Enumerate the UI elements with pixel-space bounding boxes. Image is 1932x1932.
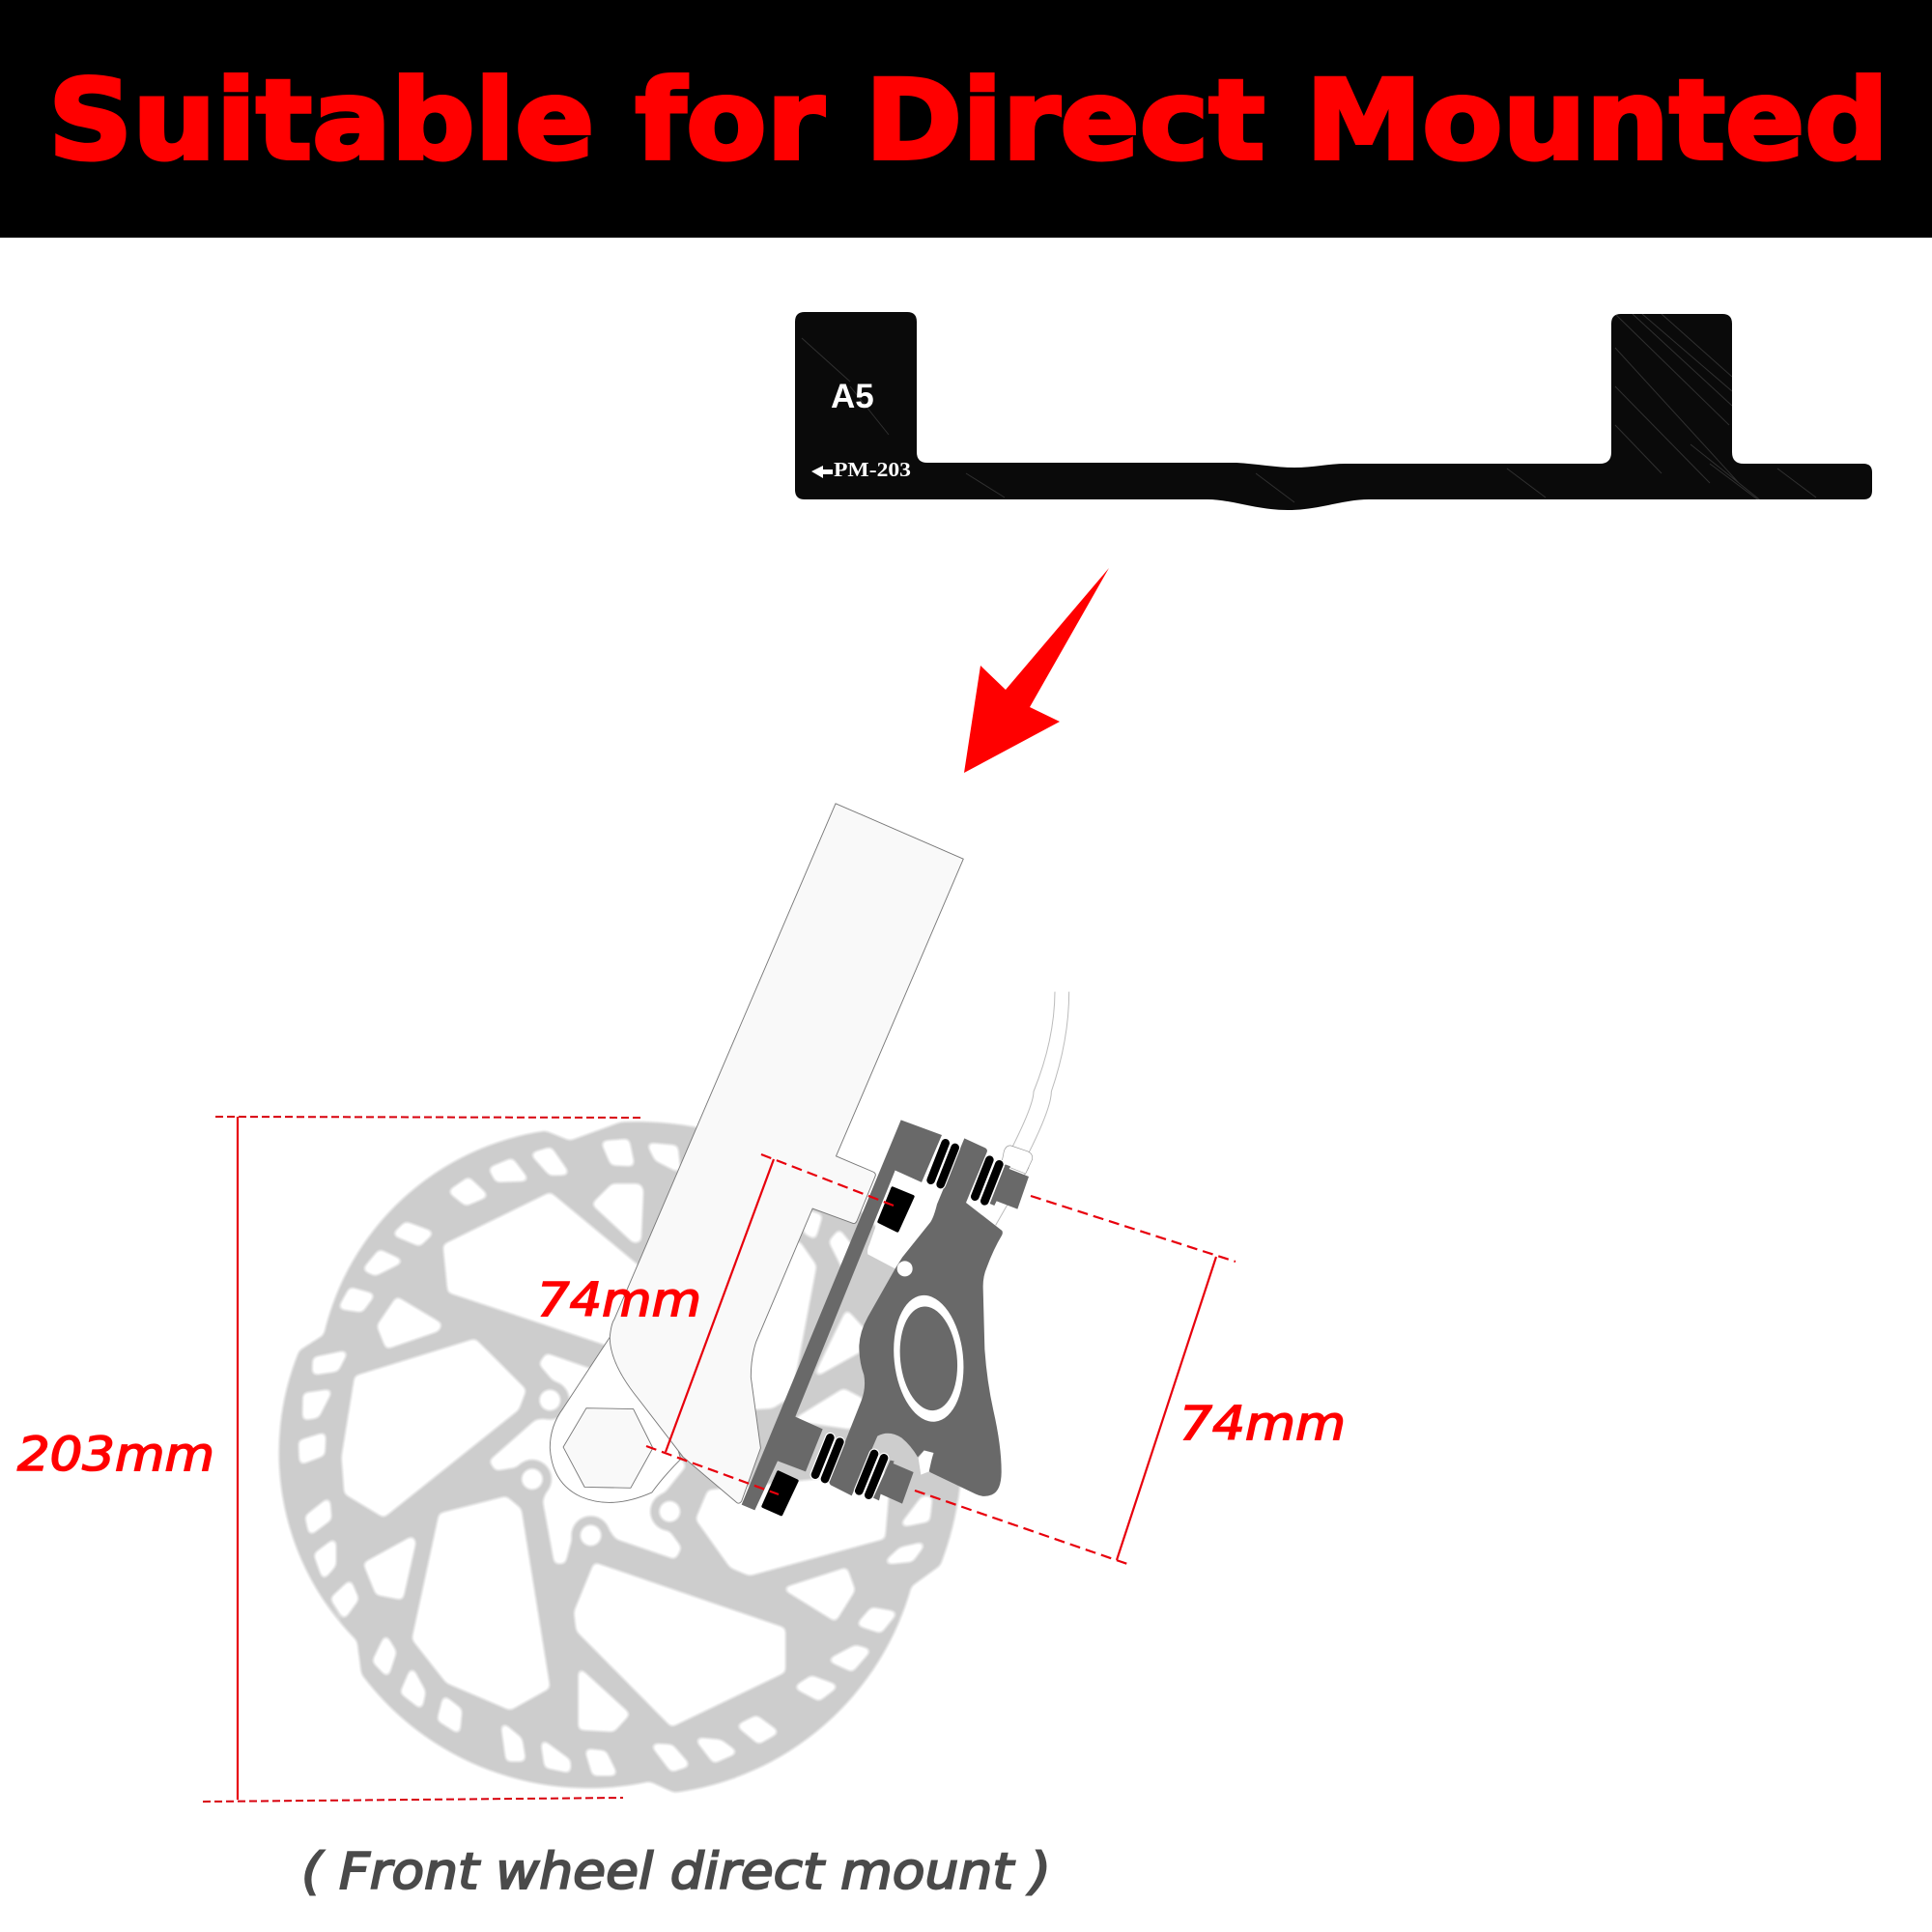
- label: 203mm: 203mm: [17, 1428, 214, 1482]
- black pads: [763, 1188, 913, 1515]
- notch: [897, 1261, 913, 1276]
- label: 74mm right: 74mm: [1179, 1397, 1346, 1451]
- dropout with axle hex: [550, 1337, 681, 1502]
- caliper piston ring: [888, 1292, 970, 1425]
- fork leg: [610, 804, 963, 1503]
- bolts: [873, 1164, 1029, 1504]
- bracket arrow glyph: [811, 466, 833, 478]
- dimension: 74mm upper and lower dashed guides: [646, 1154, 1236, 1565]
- white gaps behind caliper: [867, 1171, 944, 1268]
- springs: [815, 1143, 999, 1495]
- lower bolt notch: [919, 1451, 933, 1475]
- disc rotor: [253, 1094, 989, 1821]
- dimension: 203mm guides: [203, 1117, 640, 1802]
- title: Suitable for Direct Mounted: [48, 56, 1889, 185]
- adapter bracket A5 PM-203: [795, 312, 1872, 522]
- mounting bracket plate: [742, 1120, 942, 1510]
- bracket model label A5: A5: [831, 378, 874, 415]
- header banner: [0, 0, 1932, 238]
- hose fitting: [1002, 1146, 1033, 1174]
- brake caliper: [742, 992, 1069, 1515]
- hose: [996, 992, 1069, 1225]
- caption: ( Front wheel direct mount ): [301, 1843, 1051, 1901]
- label: 74mm left: 74mm: [537, 1273, 701, 1327]
- fork leg and dropout: [550, 804, 963, 1503]
- bracket label PM-203: PM-203: [834, 458, 911, 481]
- arrow: red pointing to fork: [964, 568, 1109, 773]
- caliper body: [829, 1138, 1003, 1496]
- dimension lines: [238, 1117, 1216, 1800]
